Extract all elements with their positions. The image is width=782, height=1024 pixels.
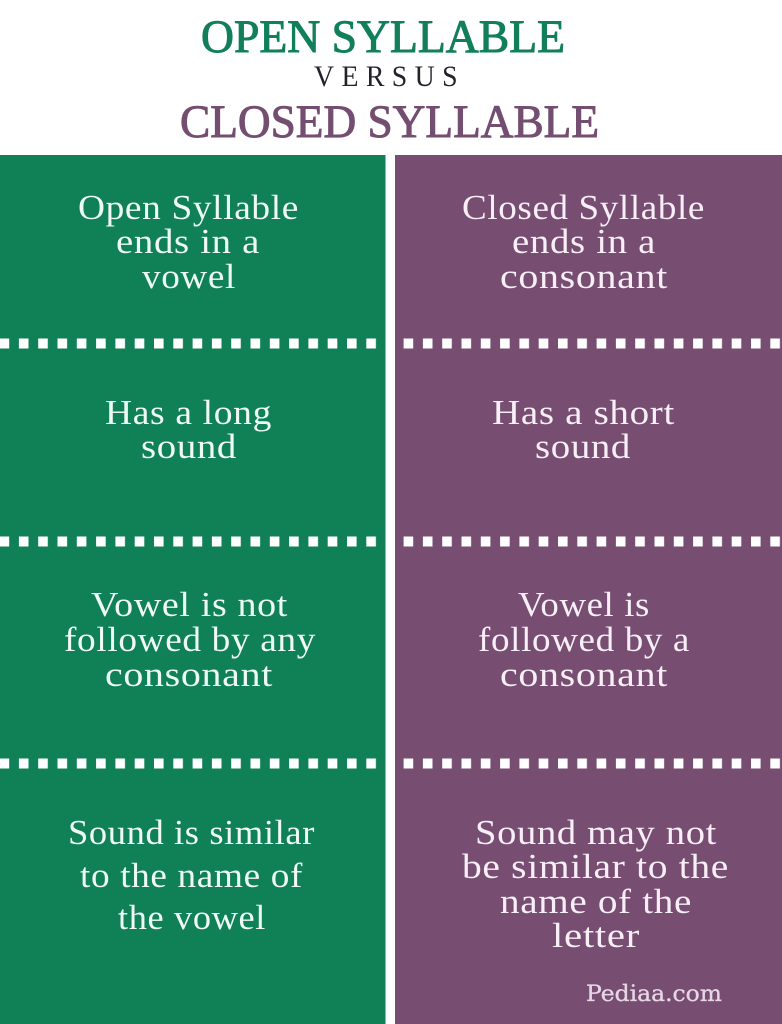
text: sound similar to vowel name: to the name of bbox=[80, 856, 303, 895]
text: vowel followed: Vowel is bbox=[518, 585, 650, 624]
text: sound may not be similar: Sound may not bbox=[475, 813, 717, 852]
text: vowel not followed: Vowel is not bbox=[91, 585, 288, 624]
text: sound may not be similar: name of the bbox=[500, 882, 692, 921]
divider row 2 left bbox=[0, 536, 378, 546]
text: ends in a consonant: consonant bbox=[500, 257, 668, 296]
panel: closed syllable column bbox=[395, 155, 782, 1024]
text: ends in a vowel: vowel bbox=[142, 257, 236, 296]
text: vowel followed: consonant bbox=[500, 655, 668, 694]
text: vowel followed: followed by a bbox=[478, 620, 690, 659]
divider row 1 right bbox=[403, 338, 782, 348]
title: closed syllable: CLOSED SYLLABLE bbox=[180, 96, 599, 148]
divider row 3 right bbox=[403, 758, 782, 768]
text: sound may not be similar: be similar to the bbox=[462, 847, 729, 886]
text: vowel not followed: consonant bbox=[105, 655, 273, 694]
text: sound may not be similar: letter bbox=[552, 916, 640, 955]
text: ends in a consonant bbox=[462, 188, 705, 296]
text: short sound bbox=[492, 393, 675, 466]
divider row 1 left bbox=[0, 338, 378, 348]
text: long sound: sound bbox=[141, 427, 237, 466]
text: short sound: sound bbox=[535, 427, 631, 466]
text: ends in a vowel: Open Syllable bbox=[78, 188, 299, 227]
text: sound similar to vowel name: the vowel bbox=[118, 898, 266, 937]
text: ends in a consonant: Closed Syllable bbox=[462, 188, 705, 227]
divider row 3 left bbox=[0, 758, 378, 768]
divider row 2 right bbox=[403, 536, 782, 546]
versus label: VERSUS bbox=[314, 60, 465, 93]
panel: open syllable column bbox=[0, 155, 386, 1024]
text: ends in a vowel: ends in a bbox=[116, 222, 260, 261]
text: sound similar to vowel name: Sound is similar bbox=[68, 813, 315, 852]
text: ends in a consonant: ends in a bbox=[512, 222, 656, 261]
text: short sound: Has a short bbox=[492, 393, 675, 432]
text: sound similar to vowel name bbox=[68, 813, 315, 937]
logo: Pediaa.com: Pediaa.com bbox=[586, 982, 722, 1007]
title: open syllable: OPEN SYLLABLE bbox=[201, 11, 565, 63]
text: long sound bbox=[105, 393, 272, 466]
text: vowel not followed bbox=[64, 585, 316, 694]
text: ends in a vowel bbox=[78, 188, 299, 296]
text: vowel followed bbox=[478, 585, 690, 694]
text: vowel not followed: followed by any bbox=[64, 620, 316, 659]
text: sound may not be similar bbox=[462, 813, 729, 955]
text: long sound: Has a long bbox=[105, 393, 272, 432]
